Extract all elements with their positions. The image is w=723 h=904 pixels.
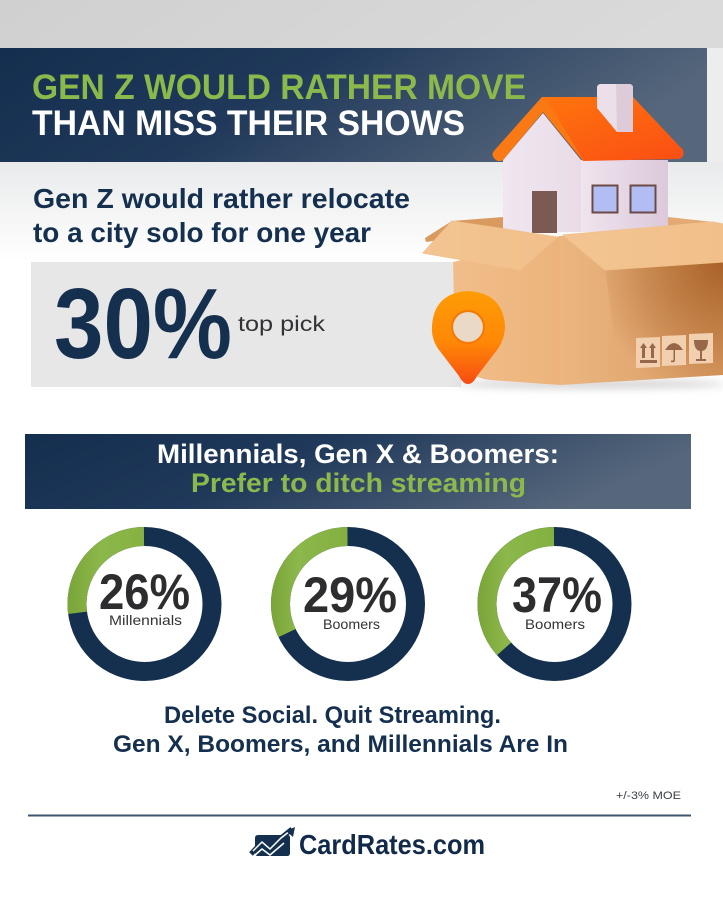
closing statement: Gen X, Boomers, and Millennials Are In: [113, 731, 568, 758]
logo: CardRates.com: [251, 827, 485, 860]
title line 1: GEN Z WOULD RATHER MOVE: [32, 68, 526, 107]
donut chart: millennials: [77, 536, 212, 672]
subheading: to a city solo for one year: [33, 217, 371, 248]
subheading: [33, 183, 410, 248]
box labels: [636, 333, 713, 368]
subheading: Gen Z would rather relocate: [33, 183, 410, 214]
box back flaps: [425, 217, 503, 242]
illustration: house in moving box: [423, 84, 723, 389]
title banner: [0, 48, 707, 162]
stat label: top pick: [238, 313, 326, 336]
section heading line 1: Millennials, Gen X & Boomers:: [157, 439, 559, 469]
donut chart: boomers 37: [487, 536, 622, 672]
donut chart: millennials: 26%: [99, 564, 190, 620]
panel: 30 percent stat: [31, 262, 461, 387]
stat number: 30%: [54, 268, 232, 380]
box front flaps: [423, 221, 557, 270]
section heading line 2: Prefer to ditch streaming: [191, 468, 526, 498]
box body: [453, 236, 560, 385]
closing statement: Delete Social. Quit Streaming.: [164, 702, 501, 729]
margin of error note: +/-3% MOE: [616, 790, 681, 802]
house: [492, 84, 684, 233]
icon: card with chart line: [251, 827, 295, 856]
donut chart: boomers 29: 29%: [303, 567, 397, 623]
donut chart: boomers 37: Boomers: [525, 616, 585, 632]
donut chart: boomers 29: [280, 536, 416, 672]
section banner: [25, 434, 691, 509]
donut chart: millennials: Millennials: [109, 612, 182, 628]
closing statement: [113, 702, 568, 758]
title line 2: THAN MISS THEIR SHOWS: [32, 104, 465, 143]
donut chart: boomers 29: Boomers: [323, 616, 380, 632]
wordmark: CardRates.com: [299, 829, 485, 860]
icon: location pin: [432, 291, 505, 384]
donut chart: boomers 37: 37%: [512, 567, 602, 623]
